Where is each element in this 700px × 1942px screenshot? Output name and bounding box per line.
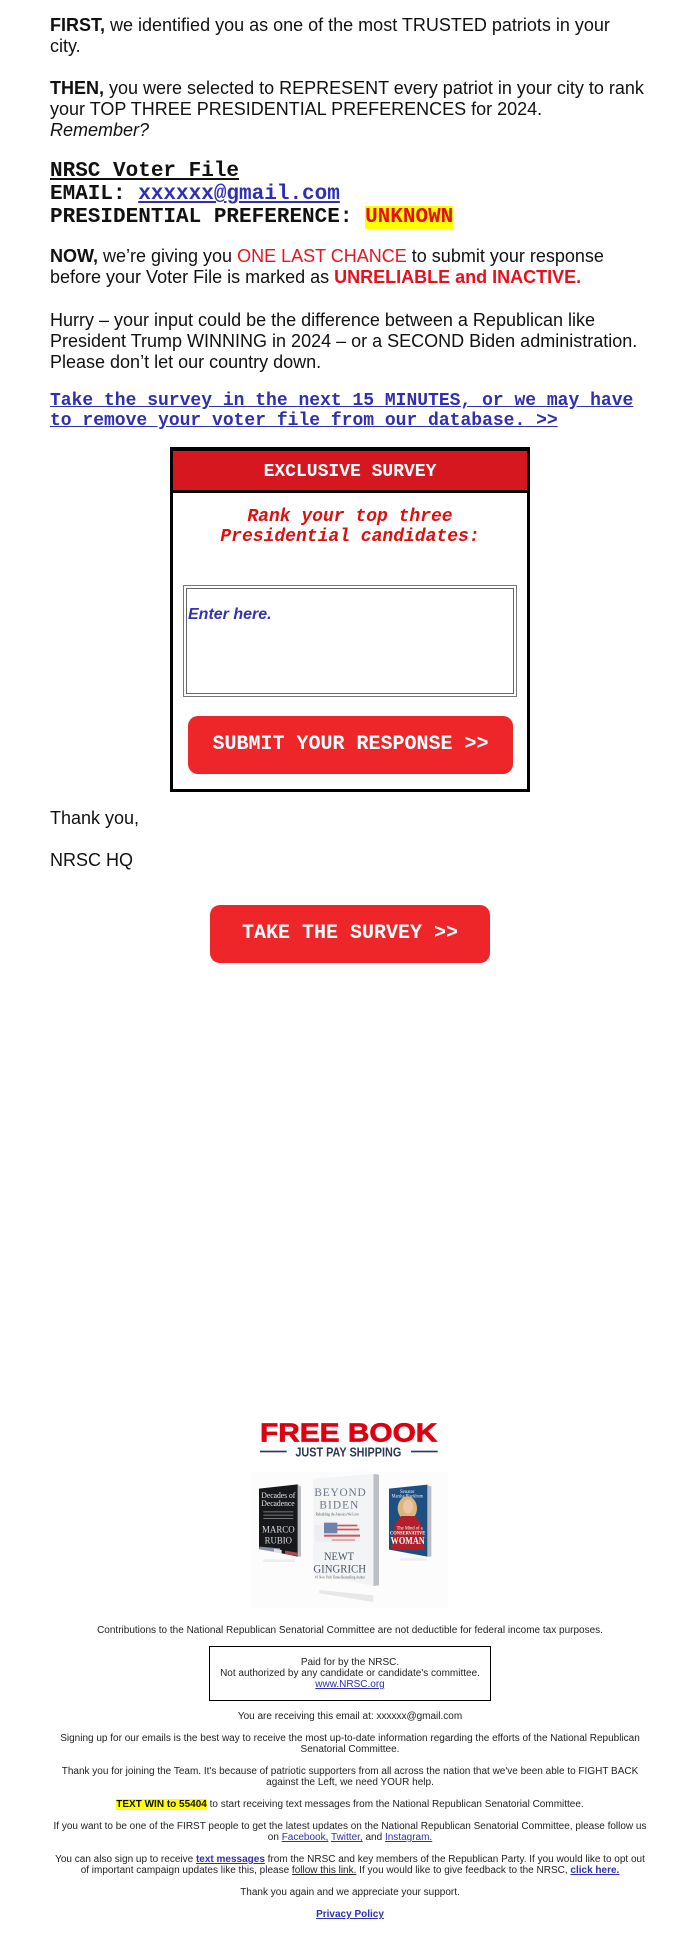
book: Beyond Biden by Newt Gingrich: #1 New York Times Bestselling Author	[315, 1576, 366, 1580]
text block: last chance warning	[50, 246, 604, 287]
book: The Mind of a Conservative Woman: CONSERVATIVE	[390, 1530, 426, 1536]
text block: NRSC voter file record: PRESIDENTIAL PREFERENCE: UNKNOWN	[50, 206, 453, 229]
book: The Mind of a Conservative Woman	[389, 1485, 431, 1561]
text block: rank your top three: Rank your top three	[247, 507, 453, 527]
text block: selected to represent: Remember?	[50, 120, 149, 140]
text block: last chance warning: before your Voter File is marked as UNRELIABLE and INACTIVE.	[50, 267, 581, 287]
book: The Mind of a Conservative Woman: The Mind of a	[397, 1524, 423, 1531]
link: privacy policy: Privacy Policy	[316, 1909, 384, 1920]
text block: hurry appeal: Please don’t let our country down.	[50, 352, 321, 372]
text block: follow us: If you want to be one of the FIRST people to get the latest updates on the National Republican Senatorial Committee, please follow us	[54, 1821, 646, 1832]
text block: disclosure lines: www.NRSC.org	[315, 1679, 385, 1690]
text block: disclosure lines: Paid for by the NRSC.	[301, 1657, 399, 1668]
text block: signing up: Senatorial Committee.	[301, 1744, 399, 1755]
text block: thank you for joining	[62, 1766, 638, 1788]
panel: paid for by disclosure	[209, 1646, 491, 1701]
book: Decades of Decadence: MARCO	[262, 1525, 295, 1536]
text block: rank your top three	[220, 507, 480, 547]
subheading: just pay shipping: JUST PAY SHIPPING	[295, 1444, 401, 1459]
text block: contributions disclaimer: Contributions to the National Republican Senatorial Committee are not deductible for federal income tax purposes.	[97, 1625, 603, 1636]
text block: thank you again: Thank you again and we appreciate your support.	[240, 1887, 460, 1898]
book: The Mind of a Conservative Woman: Senator	[400, 1490, 415, 1495]
text block: thank you for joining: Thank you for joining the Team. It's because of patriotic supporters from all across the nation that we've been able to FIGHT BACK	[62, 1766, 638, 1777]
text block: selected to represent: THEN, you were selected to REPRESENT every patriot in your city to rank	[50, 78, 644, 98]
book: The Mind of a Conservative Woman: Marsha Blackburn	[392, 1495, 424, 1500]
book: Decades of Decadence: Decades of	[261, 1491, 296, 1500]
book: Decades of Decadence: Decadence	[261, 1499, 295, 1508]
text block: text win callout: TEXT WIN to 55404 to start receiving text messages from the National Republican Senatorial Committee.	[116, 1799, 584, 1810]
input inner border with placeholder: Enter here.	[188, 606, 272, 623]
link: take the survey in 15 minutes: to remove your voter file from our database. >>	[50, 411, 558, 431]
book: Beyond Biden by Newt Gingrich	[313, 1474, 379, 1602]
text block: signing up	[60, 1733, 640, 1755]
text block: hurry appeal: President Trump WINNING in 2024 – or a SECOND Biden administration.	[50, 331, 637, 351]
heading: free book: FREE BOOK	[260, 1417, 438, 1447]
button: submit your response: SUBMIT YOUR RESPONSE >>	[212, 733, 489, 756]
text block: signature: NRSC HQ	[50, 850, 133, 870]
text block: thank you for joining: against the Left, we need YOUR help.	[266, 1777, 434, 1788]
book: Decades of Decadence: RUBIO	[265, 1535, 292, 1546]
text block: opt out	[55, 1854, 645, 1876]
image: free book promotion	[259, 1417, 438, 1602]
input inner border with placeholder	[186, 588, 514, 694]
text block: disclosure lines: Not authorized by any candidate or candidate's committee.	[220, 1668, 480, 1679]
book: The Mind of a Conservative Woman: WOMAN	[391, 1536, 425, 1547]
book: Beyond Biden by Newt Gingrich: Rebuilding the America We Love	[316, 1511, 359, 1516]
text block: thank you: Thank you,	[50, 808, 139, 828]
link: take the survey in 15 minutes	[50, 391, 634, 431]
book: Beyond Biden by Newt Gingrich: GINGRICH	[313, 1562, 366, 1576]
text block: signing up: Signing up for our emails is the best way to receive the most up-to-date information regarding the efforts of the National Republican	[60, 1733, 640, 1744]
text block: first paragraph: FIRST, we identified you as one of the most TRUSTED patriots in your	[50, 15, 610, 35]
book: Decades of Decadence	[259, 1484, 301, 1562]
text block: first paragraph: city.	[50, 36, 81, 56]
panel: exclusive survey form	[170, 447, 530, 792]
text block: first paragraph	[50, 15, 610, 56]
text block: hurry appeal: Hurry – your input could be the difference between a Republican like	[50, 310, 595, 330]
input: response text box	[183, 585, 517, 697]
book: Beyond Biden by Newt Gingrich: NEWT	[324, 1549, 355, 1563]
text block: rank your top three: Presidential candidates:	[220, 527, 480, 547]
text block: follow us: on Facebook, Twitter, and Instagram.	[268, 1832, 432, 1843]
book: Beyond Biden by Newt Gingrich: BEYOND	[314, 1487, 366, 1499]
heading: exclusive survey banner: EXCLUSIVE SURVEY	[264, 462, 436, 482]
button: take the survey	[210, 905, 490, 963]
text block: selected to represent: your TOP THREE PRESIDENTIAL PREFERENCES for 2024.	[50, 99, 542, 119]
book backdrop	[250, 1472, 448, 1608]
text block: receiving email notice: You are receiving this email at: xxxxxx@gmail.com	[238, 1711, 462, 1722]
book: Beyond Biden by Newt Gingrich: BIDEN	[319, 1500, 358, 1512]
heading: exclusive survey banner	[173, 451, 527, 493]
text block: last chance warning: NOW, we’re giving you ONE LAST CHANCE to submit your response	[50, 246, 604, 266]
text block: NRSC voter file record	[50, 160, 453, 229]
link: take the survey in 15 minutes: Take the survey in the next 15 MINUTES, or we may have	[50, 391, 633, 411]
button: take the survey: TAKE THE SURVEY >>	[242, 922, 458, 945]
text block: NRSC voter file record: EMAIL: xxxxxx@gmail.com	[50, 183, 340, 206]
text block: NRSC voter file record: NRSC Voter File	[50, 160, 239, 183]
button: submit your response	[188, 716, 513, 774]
text block: hurry appeal	[50, 310, 637, 372]
text block: opt out: You can also sign up to receive text messages from the NRSC and key members of the Republican Party. If you would like to opt out	[55, 1854, 645, 1865]
text block: disclosure lines	[220, 1657, 480, 1690]
text block: follow us	[54, 1821, 646, 1843]
text block: selected to represent	[50, 78, 644, 140]
text block: opt out: of important campaign updates like this, please follow this link. If you would like to give feedback to the NRSC, click here.	[81, 1865, 619, 1876]
